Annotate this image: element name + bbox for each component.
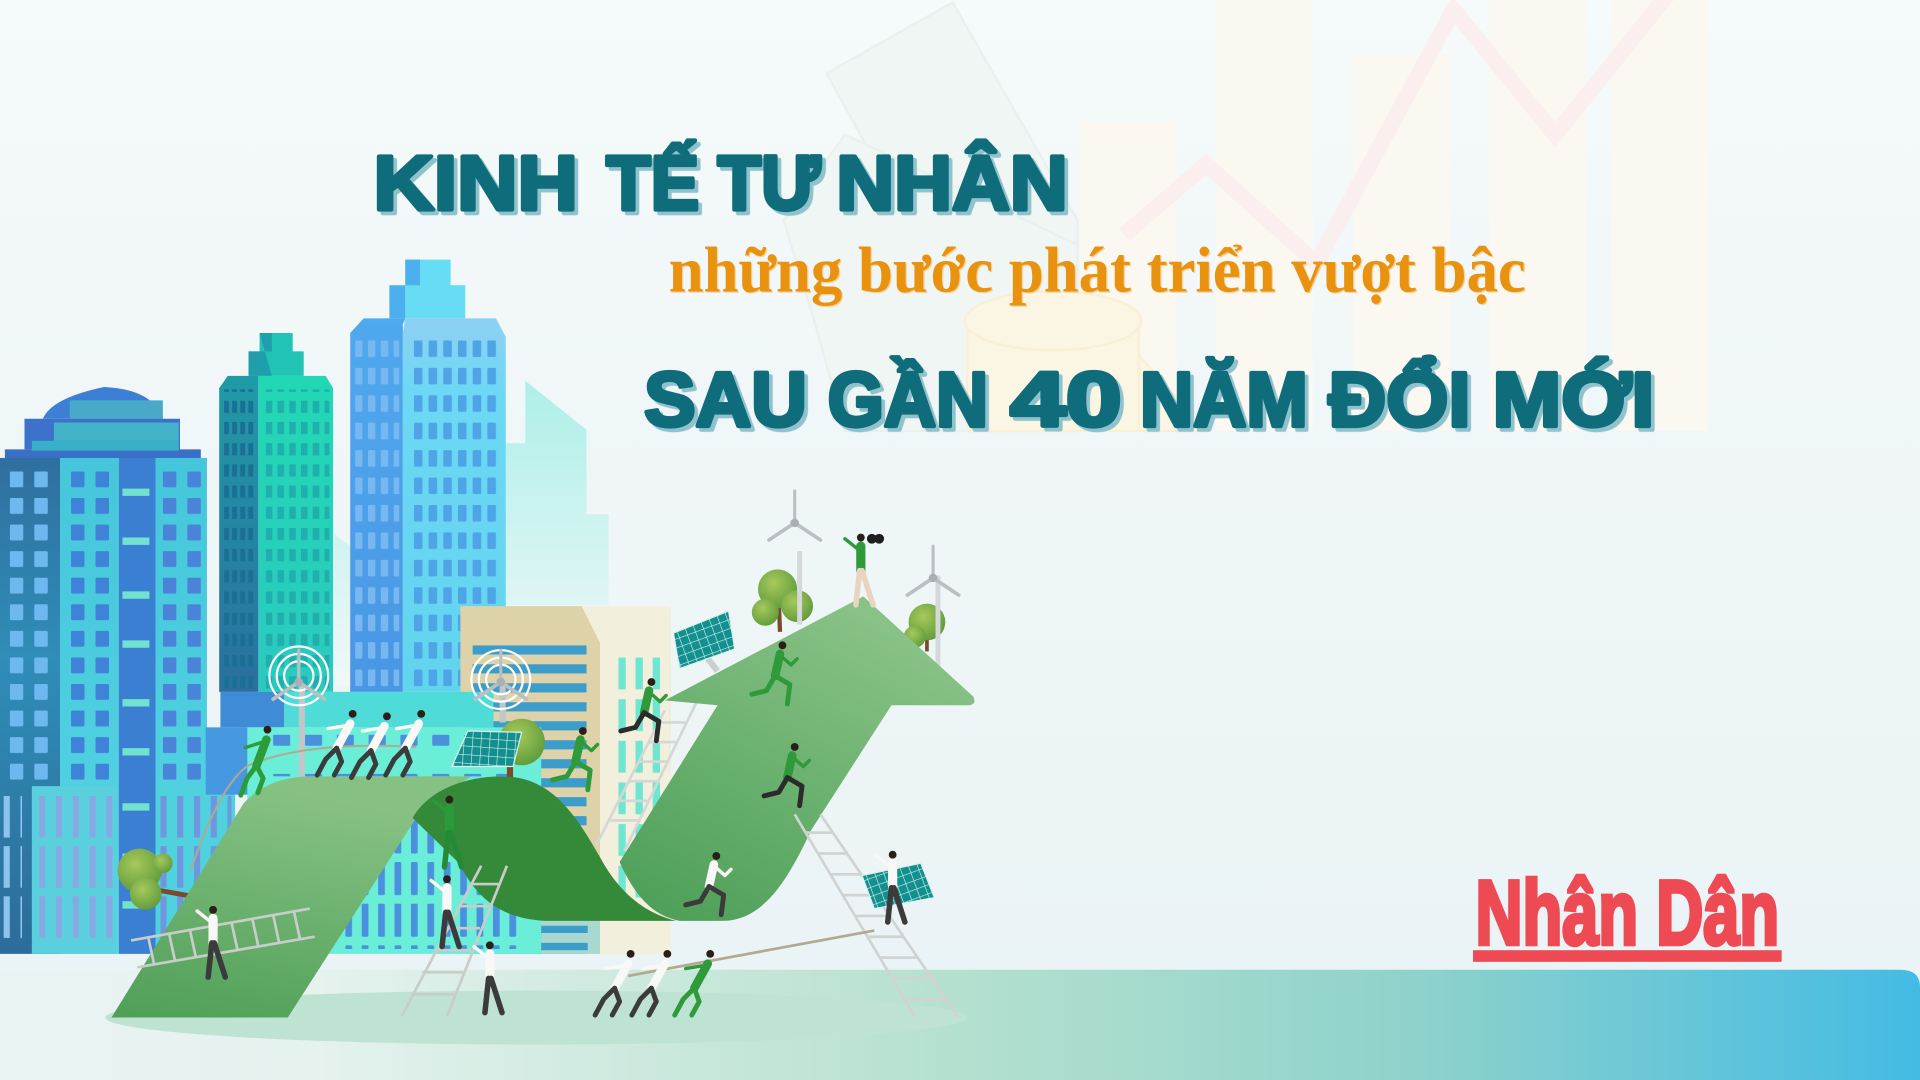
solar panel top [673,611,735,671]
tree top [752,569,813,632]
ladder: carried [131,909,315,967]
low teal block [206,692,600,954]
title line 1: TẾ [606,139,699,226]
person: lower pull 1 [595,950,635,1015]
tree right [904,604,945,651]
person: green lower pull [675,950,714,1015]
turbine top right [907,546,959,666]
ladder behind arrow [596,702,697,851]
bottom strip [0,970,1920,1080]
person: green climber [621,678,666,741]
rope: upper [191,746,416,869]
title line 1 [373,139,1068,226]
ghost coins [965,291,1206,431]
title line 2: NĂM [1140,357,1308,443]
title line 2: SAU [644,357,807,443]
pale background building [334,381,609,686]
arrow dark band [413,776,676,921]
wind turbines on roof [269,647,530,779]
dome building [0,387,235,954]
people [232,534,884,1015]
title line 1: NHÂN [836,139,1068,226]
tower: teal [219,333,333,692]
trees and panels behind arrow [118,491,959,910]
title line 2: 40 [1010,357,1122,443]
tree behind panel [498,719,545,778]
growth arrow [111,596,974,1018]
person: green jumper [552,727,598,790]
solar panel carried [862,863,934,909]
city skyline [0,260,671,954]
person: green tug [232,725,280,795]
solar panel roof [452,731,522,767]
arrow head ribbon [620,596,974,921]
tree left [118,849,192,910]
person: pull 2 [351,712,391,778]
ground ellipse [105,991,967,1044]
title line 1: TƯ [718,140,820,226]
logo: Nhân Dân: Nhân Dân [1476,863,1779,964]
tower: blue [350,260,506,692]
ghost bar chart [1080,0,1708,431]
person: pull 3 [386,710,425,775]
turbine right [471,650,530,722]
turbine top left [769,491,820,624]
title line 1: KINH [373,140,578,226]
ladder: centre [402,866,507,1016]
person: pull 1 [317,710,357,775]
ghost background: finance motif [784,0,1708,431]
person: panel carrier [877,851,905,922]
person: climbing [431,875,459,947]
person: green on band [433,796,462,867]
rope: lower [628,931,874,976]
person: standing [474,941,502,1013]
title line 2: MỚI [1493,357,1654,443]
ghost banknotes [784,2,1078,431]
person: lookout with binoculars [845,534,884,605]
ghost trend line [1124,0,1671,263]
person: runner with sapling [686,852,731,915]
subtitle: những bước phát triển vượt bậc [669,234,1526,306]
beige building [460,606,671,954]
arrow front ribbon [111,776,471,1018]
title line 2: ĐỔI [1329,356,1471,443]
person: carrying ladder [197,906,225,977]
title line 2: GẦN [828,356,988,443]
person: green runner top [752,641,797,704]
person: green woman running [764,743,809,806]
turbine left [269,647,328,779]
person: lower pull 2 [632,950,671,1015]
title line 2 [644,356,1654,443]
ladder: right [795,814,958,1016]
